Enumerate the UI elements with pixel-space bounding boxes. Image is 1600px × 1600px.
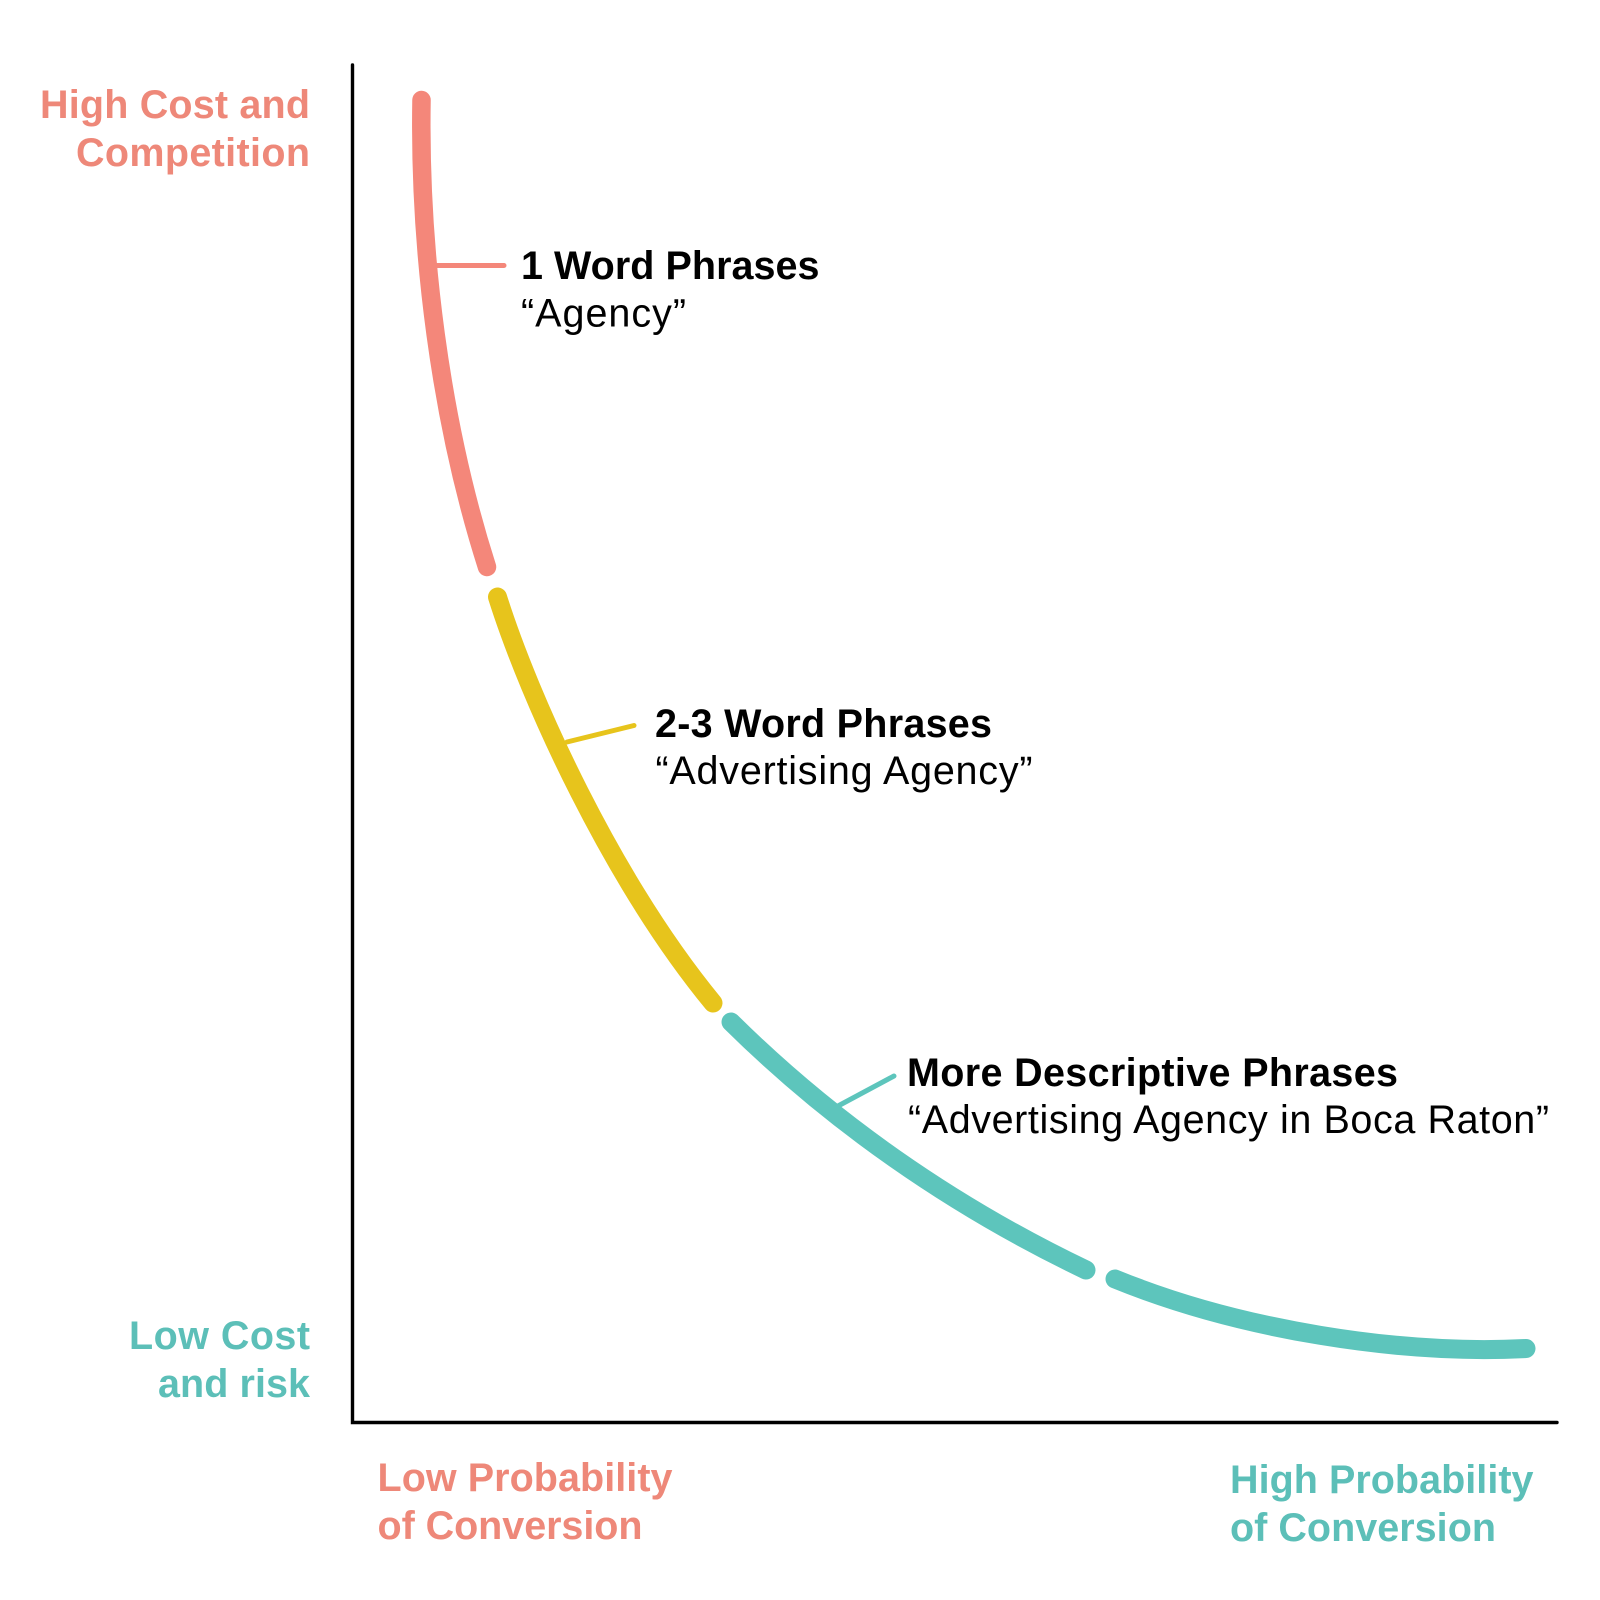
callout: 1 word phrases: 1 Word Phrases (521, 244, 820, 288)
y axis label: low cost: and risk (158, 1362, 310, 1406)
callout: 2-3 word phrases: “Advertising Agency” (656, 749, 1032, 793)
curve segment: 1 word phrases (421, 100, 504, 567)
chart axes (352, 65, 1557, 1422)
x axis label: high probability: of Conversion (1230, 1506, 1496, 1550)
callout: more descriptive phrases (907, 1051, 1549, 1142)
curve segment: long tail end (1115, 1279, 1526, 1350)
x axis label: low probability: of Conversion (378, 1504, 642, 1548)
x axis label: high probability: High Probability (1230, 1458, 1534, 1502)
y axis label: low cost (129, 1314, 310, 1406)
callout: more descriptive phrases: “Advertising Agency in Boca Raton” (908, 1098, 1549, 1142)
x axis label: low probability: Low Probability (378, 1456, 673, 1500)
callout: 2-3 word phrases (655, 702, 1032, 793)
curve segment: 2-3 word phrases (498, 597, 713, 1003)
y axis label: high cost (40, 83, 310, 175)
y axis label: low cost: Low Cost (129, 1314, 310, 1358)
callout: 2-3 word phrases: 2-3 Word Phrases (655, 702, 992, 746)
x axis label: high probability (1230, 1458, 1534, 1550)
y axis label: high cost: High Cost and (40, 83, 310, 127)
x axis label: low probability (378, 1456, 673, 1548)
callout: 1 word phrases: “Agency” (521, 292, 686, 336)
curve segment: more descriptive phrases (731, 1022, 1086, 1270)
callout: 1 word phrases (521, 244, 820, 336)
callout: more descriptive phrases: More Descriptive Phrases (907, 1051, 1398, 1095)
y axis label: high cost: Competition (76, 131, 310, 175)
